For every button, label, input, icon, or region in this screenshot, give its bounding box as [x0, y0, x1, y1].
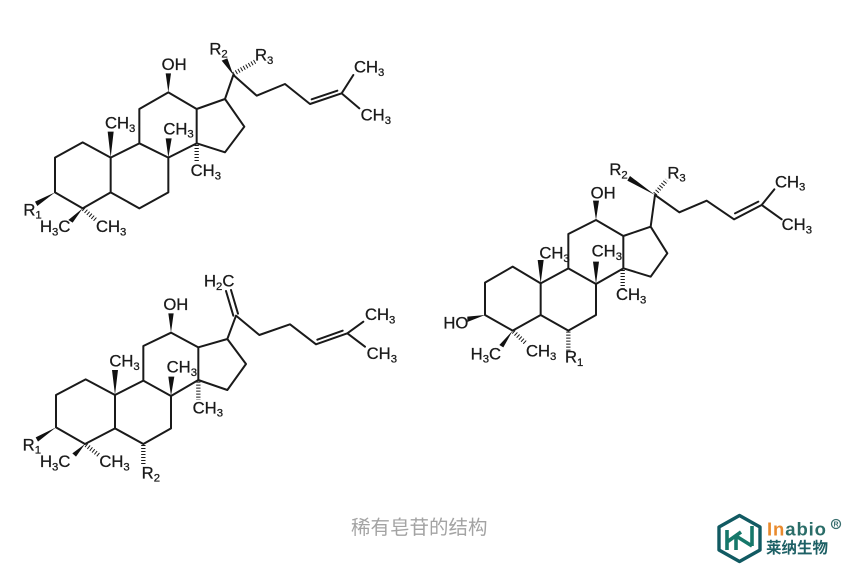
- stereo wedge bonds: [35, 58, 233, 223]
- molecule: bottom-left structure: R: [142, 463, 154, 482]
- molecule: right structure: 3: [483, 354, 489, 366]
- molecule: top-left structure: H: [40, 217, 52, 236]
- molecule: right structure: CH: [526, 342, 550, 361]
- hashed bonds: [83, 62, 255, 221]
- logo: Inabio: [719, 516, 840, 562]
- molecule: bottom-left structure: CH: [365, 305, 389, 324]
- molecule: right structure: 3: [806, 224, 812, 236]
- molecule: bottom-left structure: 3: [52, 461, 58, 473]
- molecule: bottom-left structure: 2: [154, 473, 160, 485]
- logo Chinese name: 莱纳生物: [766, 539, 828, 557]
- molecule: bottom-left structure: R: [23, 435, 35, 454]
- stereo wedge bonds: [467, 176, 655, 347]
- molecule: top-left structure: 3: [52, 226, 58, 238]
- molecule: right structure: 3: [799, 182, 805, 194]
- molecule: top-left structure: CH: [354, 58, 378, 77]
- molecule: bottom-left structure: C: [58, 452, 70, 471]
- molecule: bottom-left structure: CH: [167, 358, 191, 377]
- molecule: top-left structure: CH: [191, 161, 215, 180]
- molecule: bottom-left structure: 3: [217, 408, 223, 420]
- molecule: top-left structure: 3: [267, 55, 273, 67]
- molecule: right structure: CH: [782, 215, 806, 234]
- molecule: top-left structure: 3: [215, 170, 221, 182]
- skeleton rings and side chain: [485, 189, 782, 331]
- logo wordmark: Inabio: [767, 518, 827, 540]
- labels: OH: [162, 55, 187, 74]
- molecule: bottom-left structure: 3: [389, 314, 395, 326]
- molecule: top-left structure: 1: [35, 210, 42, 222]
- molecule: top-left structure: 3: [120, 226, 126, 238]
- molecule: top-left structure: CH: [96, 217, 120, 236]
- molecule: bottom-left structure: CH: [193, 398, 217, 417]
- molecule: bottom-left structure: H: [40, 452, 52, 471]
- molecule: bottom-left structure: 3: [191, 367, 197, 379]
- molecule: right structure: R: [609, 160, 621, 179]
- molecule: right structure: 3: [640, 294, 646, 306]
- hashed bonds: [513, 180, 667, 352]
- molecule: bottom-left structure: 3: [391, 353, 397, 365]
- icon: hexagon mark: [719, 516, 760, 562]
- molecule: top-left structure: 3: [385, 115, 391, 127]
- molecule: right structure: 3: [563, 253, 570, 265]
- labels: OH: [163, 295, 188, 314]
- molecule: right structure: 3: [550, 351, 556, 363]
- molecule: top-left structure: CH: [163, 119, 187, 138]
- caption: 稀有皂苷的结构: [351, 517, 488, 539]
- molecule: right structure: R: [565, 348, 577, 367]
- skeleton rings and side chain: [55, 75, 359, 208]
- molecule: bottom-left structure: H: [204, 272, 216, 291]
- molecule: top-left structure: 3: [378, 67, 384, 79]
- molecule: right structure: H: [471, 344, 483, 363]
- molecule: top-left structure: R: [255, 46, 267, 65]
- molecule: bottom-left structure: 2: [216, 281, 222, 293]
- molecule: top-left structure: CH: [361, 106, 385, 125]
- molecule: top-left structure: 3: [129, 123, 135, 135]
- molecule: top-left structure: C: [58, 217, 70, 236]
- molecule: right structure: 3: [679, 173, 686, 185]
- stereo wedge bonds: [36, 313, 174, 457]
- molecule: top-left structure: CH: [105, 114, 129, 133]
- molecule: top-left structure: R: [209, 39, 221, 58]
- molecule: right structure: CH: [539, 244, 563, 263]
- molecule: right structure: C: [489, 344, 501, 363]
- molecule: right structure: CH: [616, 285, 640, 304]
- molecule: bottom-left structure: CH: [109, 352, 133, 371]
- molecule: top-left structure: [23, 39, 391, 238]
- molecule: bottom-left structure: C: [222, 272, 234, 291]
- molecule: bottom-left structure: CH: [367, 344, 391, 363]
- skeleton rings and side chain: [56, 290, 365, 444]
- molecule: right structure: HO: [443, 313, 468, 332]
- molecule: top-left structure: R: [23, 200, 35, 219]
- molecule: right structure: R: [667, 163, 679, 182]
- molecule: top-left structure: 2: [221, 49, 228, 61]
- molecule: right structure: 1: [577, 357, 583, 369]
- molecule: bottom-left structure: CH: [99, 452, 123, 471]
- molecule: bottom-left structure: 3: [123, 461, 130, 473]
- labels: OH: [591, 184, 616, 203]
- molecule: right structure: CH: [775, 172, 799, 191]
- molecule: top-left structure: 3: [187, 129, 194, 141]
- molecule: right structure: CH: [592, 242, 616, 261]
- molecule: right structure: [443, 160, 812, 369]
- molecule: bottom-left structure: 3: [133, 361, 140, 373]
- hashed bonds: [86, 382, 198, 465]
- molecule: right structure: 2: [621, 169, 628, 181]
- registered mark: R: [833, 522, 839, 529]
- molecule: bottom-left structure: [23, 272, 397, 485]
- molecule: right structure: 3: [616, 251, 622, 263]
- molecule: bottom-left structure: 1: [35, 445, 41, 457]
